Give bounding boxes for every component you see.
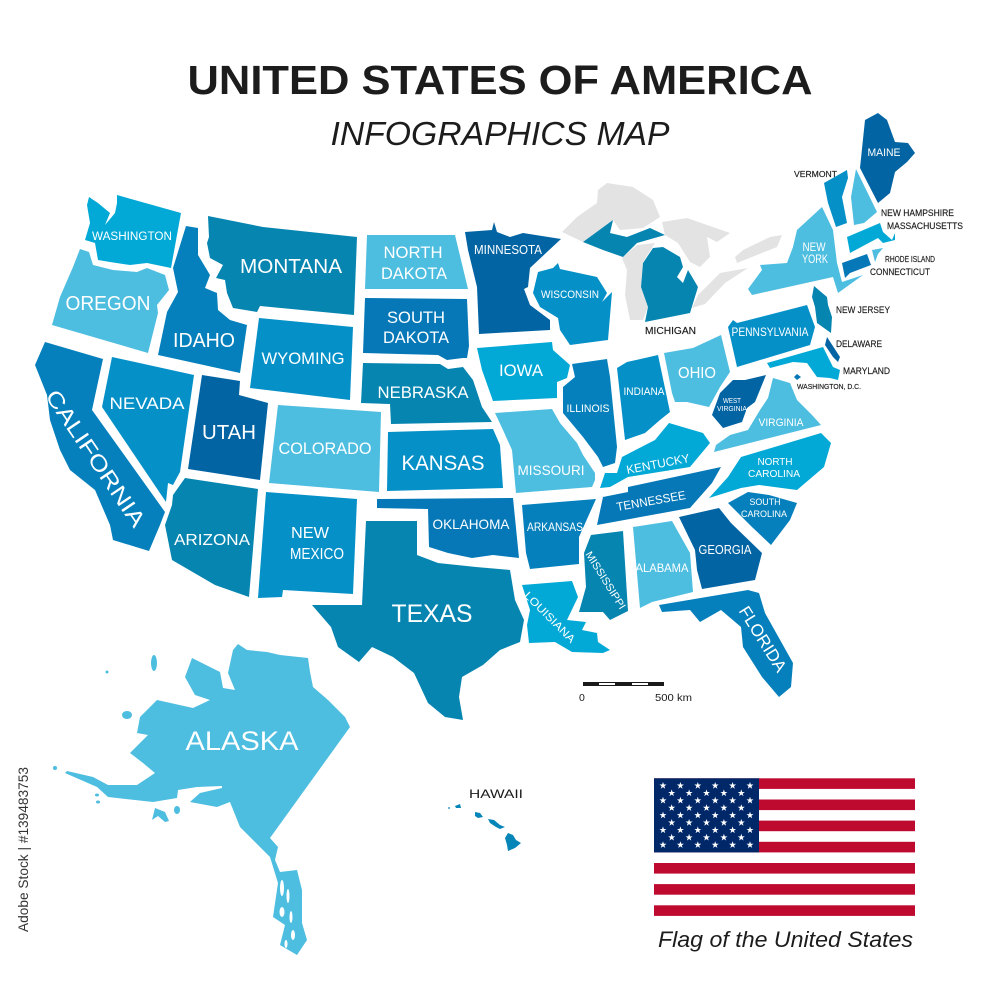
state: Oregon: OREGON [66, 293, 150, 315]
state: Ohio: OHIO [678, 365, 716, 382]
state: South Carolina: CAROLINA [741, 509, 788, 520]
state: Ohio [664, 335, 730, 407]
state: South Carolina [728, 492, 797, 545]
state: Wisconsin [533, 263, 612, 345]
state: Virginia: VIRGINIA [758, 417, 804, 429]
state: Montana [207, 216, 357, 315]
state: Maine: MAINE [868, 147, 900, 159]
state: Arizona [165, 478, 258, 597]
state: North Dakota [365, 235, 468, 289]
state: Alabama: ALABAMA [636, 561, 688, 575]
state: Iowa [477, 342, 570, 401]
state: Oklahoma [377, 498, 519, 558]
state: Rhode Island: RHODE ISLAND [885, 255, 935, 264]
state: Washington: WASHINGTON [92, 231, 172, 243]
state: New York: YORK [802, 254, 828, 266]
state: Missouri: MISSOURI [518, 462, 584, 478]
state: Tennessee [597, 467, 721, 525]
subtitle: INFOGRAPHICS MAP [330, 115, 670, 152]
state: North Carolina: CAROLINA [748, 469, 800, 480]
state: Vermont [794, 169, 848, 227]
scale bar: 500 km [655, 692, 692, 704]
state: Vermont: VERMONT [794, 169, 837, 179]
state: Idaho [158, 226, 247, 373]
state: Arkansas: ARKANSAS [527, 522, 583, 534]
state: Rhode Island [872, 248, 935, 264]
state: Idaho: IDAHO [173, 330, 235, 352]
state: West Virginia [712, 375, 766, 428]
state: Hawaii: HAWAII [469, 787, 523, 801]
state: Washington [85, 195, 181, 268]
state: Indiana [617, 355, 670, 440]
state: Illinois [563, 359, 617, 467]
state: Hawaii [448, 787, 523, 851]
state: Florida [659, 590, 793, 697]
flag caption: Flag of the United States [658, 927, 913, 952]
state: Alaska: ALASKA [186, 726, 298, 756]
state: California: CALIFORNIA [40, 385, 151, 532]
state: Louisiana [521, 581, 610, 653]
state: Colorado [269, 405, 381, 492]
state: New Jersey [812, 286, 890, 333]
state: Maryland [767, 347, 890, 380]
state: Arizona: ARIZONA [174, 532, 250, 549]
state: Texas [312, 521, 524, 720]
state: Nebraska: NEBRASKA [378, 383, 469, 402]
state: Kentucky [600, 423, 710, 488]
state: Wisconsin: WISCONSIN [541, 289, 599, 301]
state: Wyoming [250, 318, 353, 400]
state: Pennsylvania [728, 305, 815, 367]
state: Minnesota [465, 222, 561, 334]
state: Pennsylvania: PENNSYLVANIA [732, 327, 809, 339]
stock id: Adobe Stock | #139483753 [15, 767, 31, 932]
state: Massachusetts [847, 221, 963, 253]
state: Delaware [825, 337, 882, 362]
state: Maryland: MARYLAND [843, 366, 890, 376]
state: Mississippi: MISSISSIPPI [583, 549, 628, 612]
state: Alaska [53, 644, 350, 955]
state: Utah [188, 375, 268, 480]
state: Utah: UTAH [202, 422, 256, 444]
state: New York [748, 207, 863, 295]
state: South Dakota: SOUTH [387, 308, 445, 327]
state: Maine [860, 113, 915, 203]
state: Georgia: GEORGIA [698, 542, 752, 557]
state: Kentucky: KENTUCKY [625, 451, 691, 477]
state: North Carolina: NORTH [758, 457, 792, 468]
state: New Mexico [258, 492, 357, 598]
title: UNITED STATES OF AMERICA [188, 57, 812, 103]
state: Wyoming: WYOMING [262, 349, 344, 368]
state: Michigan: MICHIGAN [645, 326, 696, 337]
state: New Hampshire: NEW HAMPSHIRE [881, 208, 954, 218]
scale bar [579, 682, 692, 704]
state: Virginia [714, 378, 821, 452]
state: Iowa: IOWA [499, 361, 544, 380]
state: South Dakota: DAKOTA [383, 328, 450, 347]
state: North Dakota: NORTH [384, 243, 442, 262]
state: Colorado: COLORADO [278, 439, 372, 458]
state: Delaware: DELAWARE [836, 339, 882, 349]
state: South Dakota [363, 298, 469, 360]
state: Missouri [495, 409, 595, 493]
state: North Dakota: DAKOTA [381, 264, 448, 283]
scale bar: 0 [579, 692, 585, 704]
state: Texas: TEXAS [392, 600, 472, 628]
Washington, D.C. [794, 374, 861, 391]
state: New York: NEW [802, 242, 826, 254]
state: New Mexico: MEXICO [290, 546, 344, 563]
state: Arkansas [522, 499, 596, 569]
state: North Carolina [709, 433, 831, 498]
state: West Virginia: WEST [723, 398, 742, 405]
state: Illinois: ILLINOIS [566, 403, 610, 415]
state: New Mexico: NEW [291, 525, 330, 542]
state: New Jersey: NEW JERSEY [836, 305, 890, 315]
state: Michigan [583, 220, 698, 337]
flag [654, 778, 915, 916]
Washington, D.C.: WASHINGTON, D.C. [797, 384, 861, 391]
state: Nebraska [361, 363, 492, 424]
state: Kansas: KANSAS [402, 452, 484, 475]
state: Massachusetts: MASSACHUSETTS [887, 221, 963, 231]
state: Nevada [102, 357, 194, 502]
state: Tennessee: TENNESSEE [615, 488, 687, 514]
great lakes [562, 183, 782, 320]
state: Connecticut [842, 254, 930, 278]
state: New Hampshire [851, 169, 954, 225]
state: Georgia [679, 508, 762, 589]
state: South Carolina: SOUTH [750, 497, 781, 508]
state: Mississippi [579, 531, 628, 620]
state: Minnesota: MINNESOTA [474, 242, 542, 257]
state: Alabama [633, 521, 693, 608]
state: Oklahoma: OKLAHOMA [432, 516, 510, 532]
state: Oregon [52, 249, 169, 353]
state: Connecticut: CONNECTICUT [870, 267, 930, 277]
state: Louisiana: LOUISIANA [521, 590, 578, 646]
state: Kansas [387, 429, 503, 491]
state: Florida: FLORIDA [735, 603, 791, 676]
state: Indiana: INDIANA [624, 386, 665, 398]
state: California [35, 342, 165, 551]
state: Montana: MONTANA [240, 256, 343, 278]
state: West Virginia: VIRGINIA [717, 406, 747, 413]
state: Nevada: NEVADA [110, 394, 185, 413]
